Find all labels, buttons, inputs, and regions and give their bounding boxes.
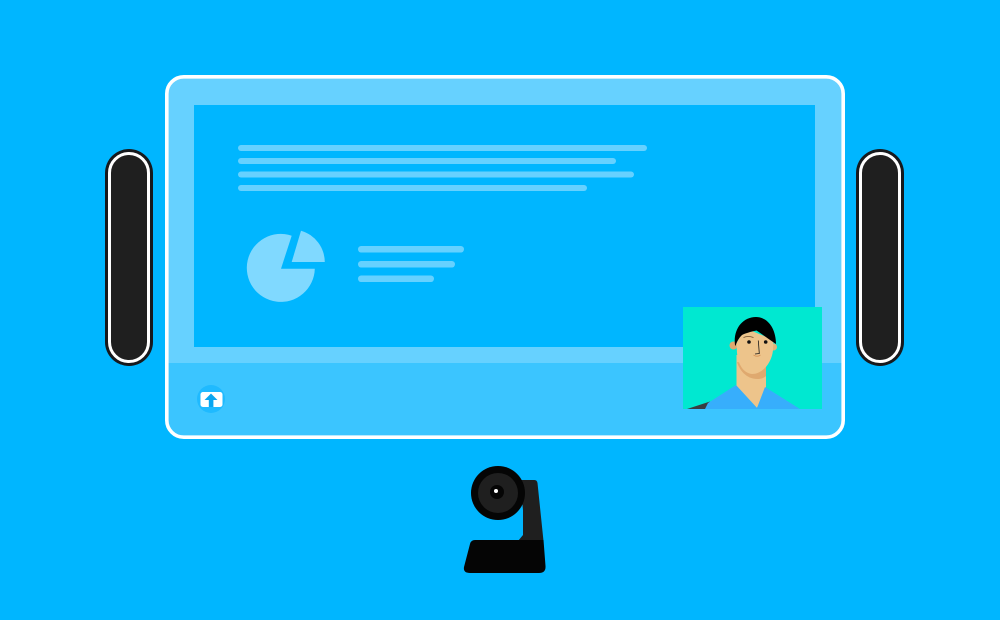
hair (735, 317, 776, 346)
mouth (754, 355, 760, 356)
neck (736, 355, 766, 408)
document text lines (238, 145, 647, 191)
shirt (705, 385, 800, 409)
right speaker (856, 149, 904, 366)
chair (687, 402, 710, 409)
conference camera (464, 466, 546, 573)
eyes (747, 340, 751, 344)
camera head (471, 466, 525, 520)
eyebrow (744, 336, 754, 338)
ears (730, 342, 738, 350)
display panel (167, 77, 843, 437)
camera base (464, 540, 546, 573)
pie chart (247, 231, 325, 302)
left speaker (105, 149, 153, 366)
shared screen (194, 105, 815, 347)
icon: screen share (197, 385, 225, 413)
chart legend lines (358, 246, 464, 282)
camera arm (518, 480, 544, 541)
video call tile (683, 307, 822, 409)
face (736, 328, 774, 374)
nose (755, 340, 759, 354)
